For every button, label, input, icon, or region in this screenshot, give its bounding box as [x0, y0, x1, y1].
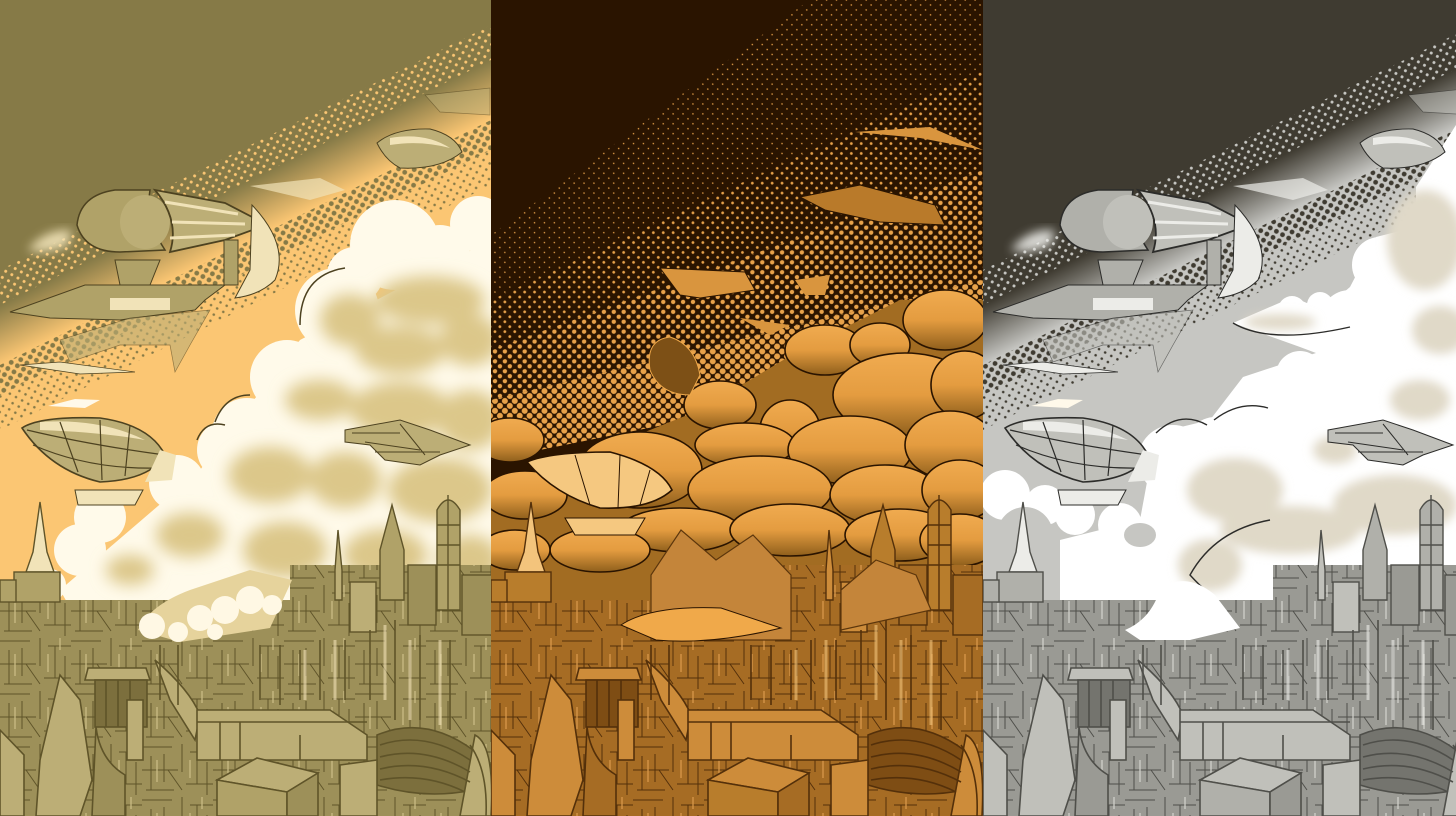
city with mountains	[491, 495, 991, 816]
airship and flying shapes	[527, 127, 983, 535]
low cloud over city	[138, 570, 292, 642]
clouds	[491, 289, 983, 600]
clouds	[983, 125, 1456, 600]
panel: left sepia sky scene	[0, 0, 506, 816]
clouds	[54, 196, 491, 600]
grey sky pockets inside cloud	[1002, 507, 1156, 547]
halftone band	[983, 34, 1456, 430]
sky gradient	[0, 0, 491, 600]
panel: right greyscale scene	[980, 0, 1456, 816]
airships	[10, 88, 490, 505]
halftone band	[0, 25, 491, 430]
sky gradient	[983, 0, 1456, 600]
dark sky	[491, 0, 983, 480]
airships	[993, 88, 1456, 505]
halftone dots	[491, 0, 983, 460]
city skyline	[0, 495, 500, 816]
panel: middle orange scene	[476, 0, 1000, 816]
city skyline	[983, 495, 1456, 816]
low cloud over city	[1125, 581, 1240, 640]
